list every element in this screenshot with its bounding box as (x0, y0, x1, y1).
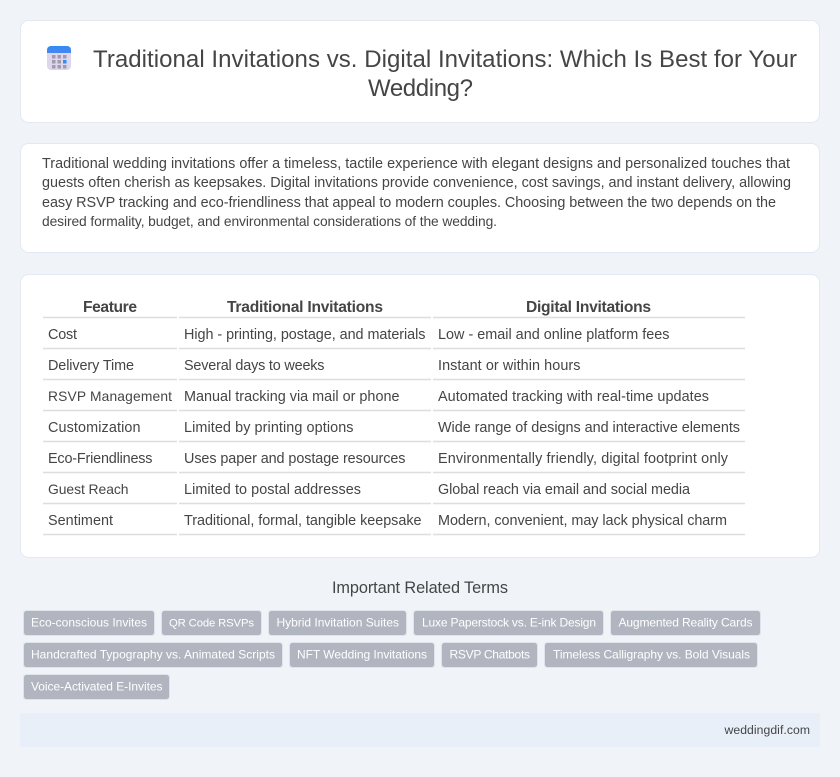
related terms heading: Important Related Terms (332, 579, 508, 597)
tag: Handcrafted Typography vs. Animated Scripts: Handcrafted Typography vs. Animated Scripts (31, 648, 275, 662)
row: eco-friendliness: Eco-Friendliness (48, 451, 152, 467)
row: customization: Limited by printing options (184, 420, 354, 436)
row: delivery time: Several days to weeks (184, 358, 324, 374)
table header row: Traditional Invitations (227, 299, 383, 316)
table header row (43, 299, 745, 318)
table header row: Feature (83, 299, 137, 316)
tag: Timeless Calligraphy vs. Bold Visuals: Timeless Calligraphy vs. Bold Visuals (553, 648, 750, 662)
tag: Eco-conscious Invites: Eco-conscious Invites (31, 616, 147, 630)
tag: Luxe Paperstock vs. E-ink Design: Luxe Paperstock vs. E-ink Design (422, 616, 596, 630)
row: eco-friendliness: Environmentally friendly, digital footprint only (438, 451, 729, 467)
row: delivery time: Instant or within hours (438, 358, 580, 374)
panel: introduction (20, 144, 820, 252)
row: eco-friendliness: Uses paper and postage resources (184, 451, 406, 467)
tag: Eco-conscious Invites (24, 610, 154, 636)
tag: Timeless Calligraphy vs. Bold Visuals (544, 642, 758, 668)
intro text: Traditional wedding invitations offer a timeless, tactile experience with elegant designs and personalized touches that (42, 156, 790, 172)
row: guest reach: Global reach via email and social media (438, 482, 690, 498)
row: rsvp management: Manual tracking via mail or phone (184, 389, 400, 405)
tag: Voice-Activated E-Invites: Voice-Activated E-Invites (31, 680, 162, 694)
intro text: guests often cherish as keepsakes. Digital invitations provide convenience, cost savings, and instant delivery, allowing (42, 175, 791, 191)
row: rsvp management: RSVP Management (48, 389, 172, 404)
row: sentiment: Sentiment (48, 513, 113, 529)
row: delivery time (43, 358, 745, 380)
tag: NFT Wedding Invitations: NFT Wedding Invitations (297, 648, 427, 662)
table header row: Digital Invitations (526, 299, 651, 316)
tag: Voice-Activated E-Invites (24, 674, 170, 700)
row: rsvp management (43, 389, 745, 410)
row: sentiment (43, 513, 745, 534)
footer source text: weddingdif.com (724, 723, 810, 737)
row: guest reach: Guest Reach (48, 481, 128, 497)
panel: header (20, 20, 820, 122)
row: sentiment: Traditional, formal, tangible keepsake (184, 513, 422, 529)
row: sentiment: Modern, convenient, may lack physical charm (438, 513, 727, 529)
row: customization (43, 420, 745, 442)
row: cost: High - printing, postage, and materials (184, 327, 426, 343)
row: customization: Wide range of designs and interactive elements (438, 420, 740, 436)
row: rsvp management: Automated tracking with real-time updates (438, 389, 709, 405)
title: Traditional Invitations vs. Digital Invitations: Which Is Best for Your (93, 46, 797, 73)
title (93, 46, 797, 102)
row: guest reach (43, 481, 745, 504)
intro text: easy RSVP tracking and eco-friendliness that appeal to modern couples. Choosing between the two depends on the (42, 195, 776, 211)
tag: QR Code RSVPs: QR Code RSVPs (169, 618, 254, 630)
icon: calendar (47, 46, 71, 70)
tag: Hybrid Invitation Suites: Hybrid Invitation Suites (276, 616, 399, 630)
intro text (42, 156, 791, 229)
row: delivery time: Delivery Time (48, 358, 134, 374)
row: guest reach: Limited to postal addresses (184, 482, 361, 498)
title: Wedding? (368, 75, 473, 102)
intro text: desired formality, budget, and environmental considerations of the wedding. (42, 214, 497, 229)
tag: NFT Wedding Invitations (290, 642, 434, 668)
row: cost (43, 327, 745, 348)
footer bar (20, 713, 820, 747)
row: eco-friendliness (43, 451, 745, 472)
tag: Augmented Reality Cards (610, 610, 760, 636)
row: customization: Customization (48, 420, 140, 436)
tag: Augmented Reality Cards: Augmented Reality Cards (618, 616, 752, 630)
tag: QR Code RSVPs (162, 610, 262, 636)
tag: Hybrid Invitation Suites (268, 610, 406, 636)
related terms tags (24, 610, 760, 700)
tag: RSVP Chatbots: RSVP Chatbots (450, 648, 530, 662)
tag: Luxe Paperstock vs. E-ink Design (414, 610, 604, 636)
row: cost: Low - email and online platform fees (438, 327, 670, 343)
panel: comparison table (20, 274, 820, 558)
row: cost: Cost (48, 327, 77, 343)
tag: RSVP Chatbots (442, 642, 538, 668)
tag: Handcrafted Typography vs. Animated Scripts (24, 642, 282, 668)
